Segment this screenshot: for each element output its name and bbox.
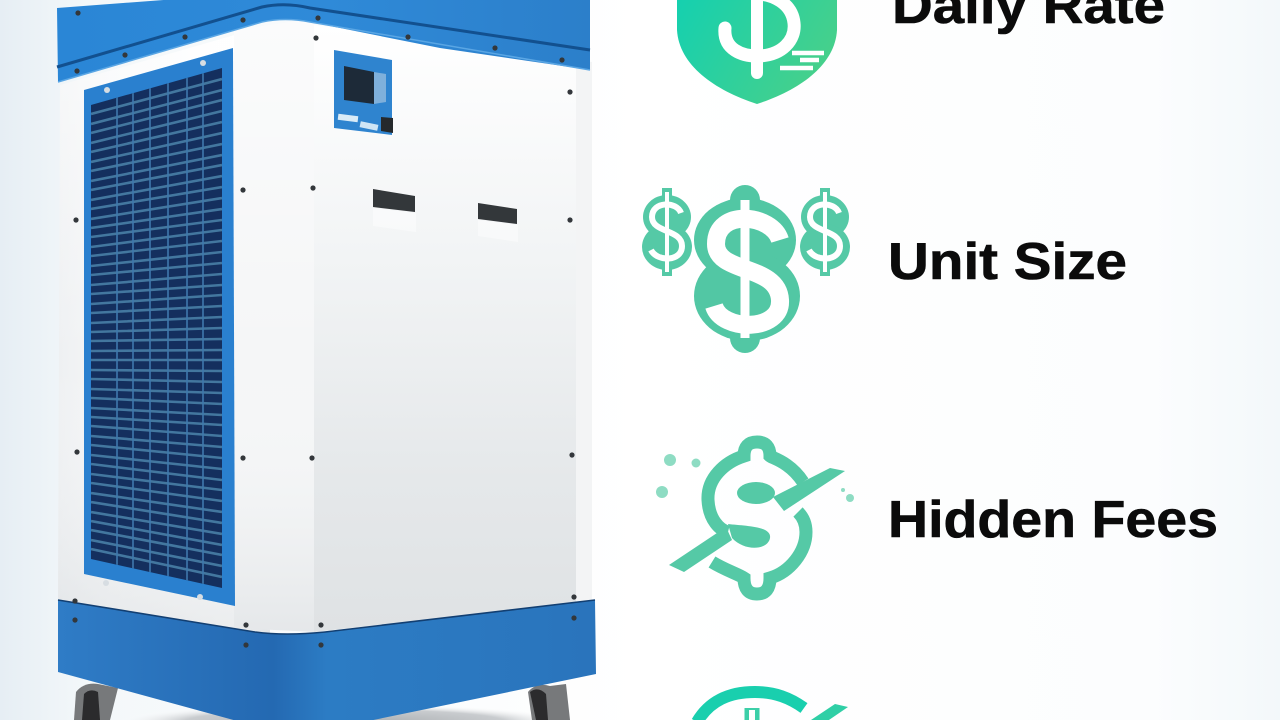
small dollar left [642, 188, 692, 276]
icon: three dollar signs [642, 188, 850, 341]
heading: Hidden Fees: Hidden Fees [888, 491, 1218, 549]
icon: crossed-out dollar [656, 442, 854, 594]
grille frame [84, 48, 235, 606]
control panel [334, 50, 393, 135]
top cap [57, 0, 590, 82]
small dollar right [800, 188, 850, 276]
front panel [314, 25, 592, 632]
floor shadow [115, 704, 575, 720]
base [58, 600, 596, 720]
icon: clipped ring with dollar and slash [697, 692, 848, 720]
cooling unit [57, 0, 596, 720]
heading: Unit Size: Unit Size [888, 233, 1127, 291]
wheels [74, 684, 570, 720]
icon: shield with dollar [677, 0, 837, 104]
light frame screws [103, 60, 206, 600]
screws [72, 10, 577, 648]
grille [91, 68, 222, 588]
smoke wisps [656, 454, 854, 502]
left side panel [58, 25, 270, 634]
large dollar centre [694, 198, 800, 341]
corner and right side [234, 18, 316, 632]
vent slots [373, 189, 518, 242]
